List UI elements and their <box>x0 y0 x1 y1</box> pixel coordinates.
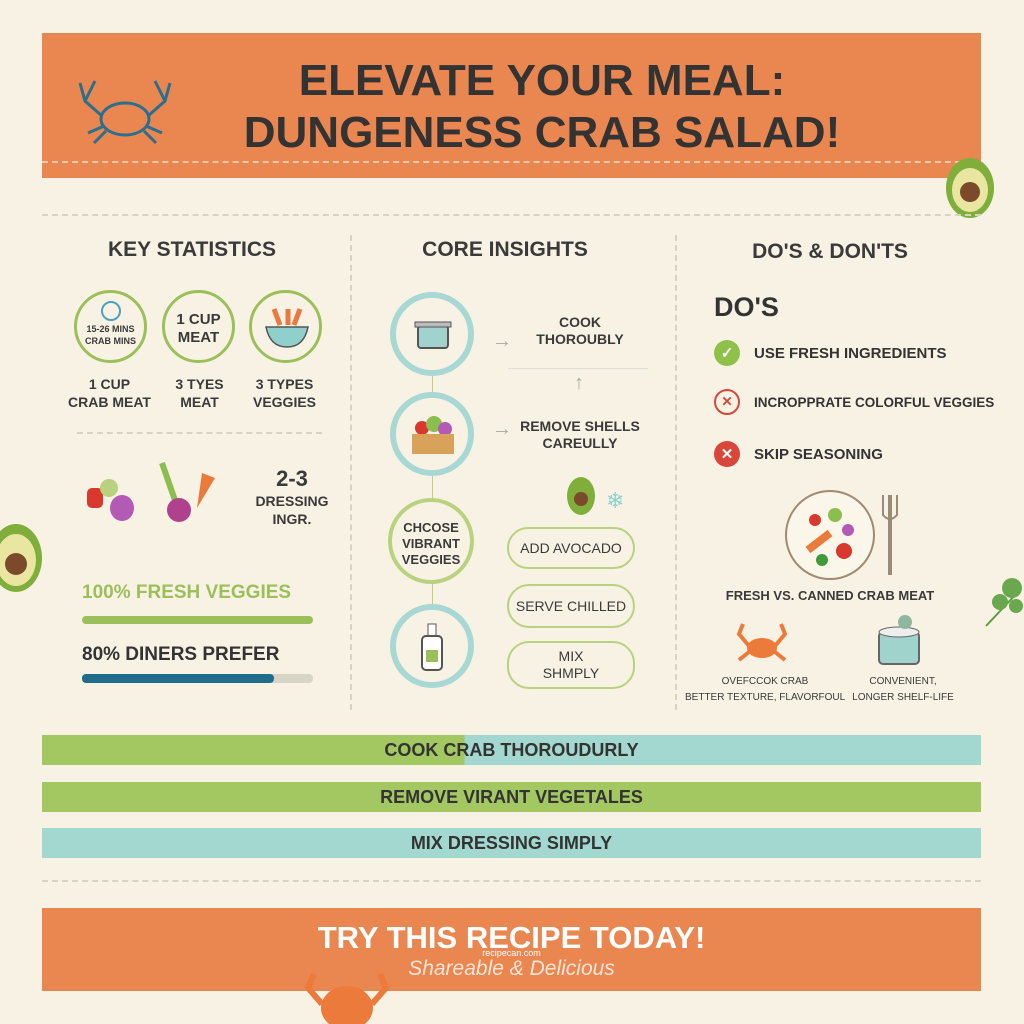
icon: avocado top right <box>946 158 994 218</box>
do item <box>714 340 947 366</box>
step: basket <box>390 392 474 476</box>
title: DUNGENESS CRAB SALAD! <box>244 108 840 157</box>
bar: cook crab <box>42 735 981 765</box>
do item: USE FRESH INGREDIENTS <box>754 344 947 362</box>
panel: do's and don'ts: BETTER TEXTURE, FLAVORFOUL <box>685 692 845 703</box>
pill: add avocado: ADD AVOCADO <box>520 540 622 556</box>
heading: CORE INSIGHTS <box>422 238 588 261</box>
do item <box>714 389 994 415</box>
panel: do's and don'ts: CONVENIENT, <box>869 676 937 687</box>
panel: key statistics: MEAT <box>180 394 219 410</box>
stat: cup: MEAT <box>178 329 219 346</box>
pill: serve chilled <box>507 584 635 628</box>
pill: serve chilled: SERVE CHILLED <box>516 598 626 614</box>
bar: mix dressing: MIX DRESSING SIMPLY <box>411 832 612 852</box>
stat: cup: 1 CUP <box>176 311 221 328</box>
stat: dressing: 2-3 <box>276 466 308 491</box>
icon: veggies <box>87 462 215 522</box>
panel: key statistics: 3 TYPES <box>256 376 313 392</box>
footer banner: recipecan.com <box>482 948 541 958</box>
panel: core insights: ↑ <box>574 372 584 394</box>
step: veggies: CHCOSE <box>403 520 459 535</box>
panel: do's and don'ts: LONGER SHELF-LIFE <box>852 692 954 703</box>
icon: parsley <box>985 578 1023 627</box>
icon: footer crab <box>304 973 390 1024</box>
icon: crab outline <box>78 80 172 144</box>
panel: core insights: THOROUBLY <box>536 331 624 347</box>
pill: mix simply <box>507 641 635 689</box>
step: veggies <box>388 498 474 584</box>
stat: timer: CRAB MINS <box>85 336 136 346</box>
panel: key statistics: 3 TYES <box>175 376 224 392</box>
step: bottle <box>390 604 474 688</box>
dont item: SKIP SEASONING <box>754 446 883 462</box>
panel: key statistics: 1 CUP <box>89 376 130 392</box>
stat: dressing <box>255 466 329 527</box>
step: veggies: VIBRANT <box>402 536 460 551</box>
panel: do's and don'ts: FRESH VS. CANNED CRAB MEAT <box>726 588 934 603</box>
panel: key statistics: VEGGIES <box>253 394 316 410</box>
bar: fresh veggies: 100% FRESH VEGGIES <box>82 582 291 603</box>
panel: core insights: ❄ <box>606 488 624 513</box>
pill: mix simply: MIX <box>559 648 583 664</box>
heading: DO'S & DON'TS <box>752 240 908 263</box>
icon: avocado left <box>0 524 42 592</box>
title <box>244 56 840 157</box>
icon: can <box>878 615 920 665</box>
panel: do's and don'ts <box>685 240 994 703</box>
stat: bowl <box>249 290 322 363</box>
title: ELEVATE YOUR MEAL: <box>299 56 785 105</box>
panel: core insights: → <box>492 330 512 352</box>
dont item: ✕ <box>721 446 733 463</box>
panel: do's and don'ts: DO'S <box>714 292 779 322</box>
panel: do's and don'ts: OVEFCCOK CRAB <box>722 676 808 687</box>
panel: core insights: CAREULLY <box>543 435 617 451</box>
icon: salad plate <box>785 490 898 580</box>
panel: core insights <box>388 238 648 689</box>
footer banner <box>42 908 981 991</box>
stat: dressing: DRESSING <box>255 493 329 509</box>
bar: cook crab: COOK CRAB THOROUDURLY <box>384 740 639 760</box>
panel: core insights: → <box>492 418 512 440</box>
pill: add avocado <box>507 527 635 569</box>
panel: core insights: COOK <box>559 314 601 330</box>
do item: ✕ <box>721 394 733 409</box>
stat: timer: 15-26 MINS <box>86 324 135 334</box>
stat: cup <box>162 290 235 363</box>
stat: timer <box>74 290 147 363</box>
bar: diners prefer: 80% DINERS PREFER <box>82 644 279 665</box>
step: pot <box>390 292 474 376</box>
panel: key statistics: CRAB MEAT <box>68 394 151 410</box>
panel: key statistics <box>68 238 329 683</box>
step: veggies: VEGGIES <box>402 552 460 567</box>
stat: dressing: INGR. <box>273 511 311 527</box>
panel: core insights: REMOVE SHELLS <box>520 418 640 434</box>
bar: mix dressing <box>42 828 981 858</box>
icon: crab <box>736 623 788 662</box>
bar: remove veggies <box>42 782 981 812</box>
do item: ✓ <box>721 345 733 362</box>
heading: KEY STATISTICS <box>108 238 276 261</box>
footer banner: Shareable & Delicious <box>408 957 615 980</box>
dont item <box>714 441 883 467</box>
pill: mix simply: SHMPLY <box>543 665 599 681</box>
header banner <box>42 33 981 178</box>
bar: remove veggies: REMOVE VIRANT VEGETALES <box>380 786 643 806</box>
do item: INCROPPRATE COLORFUL VEGGIES <box>754 394 994 410</box>
icon: avocado small <box>567 477 595 515</box>
footer text: TRY THIS RECIPE TODAY! <box>318 920 705 955</box>
